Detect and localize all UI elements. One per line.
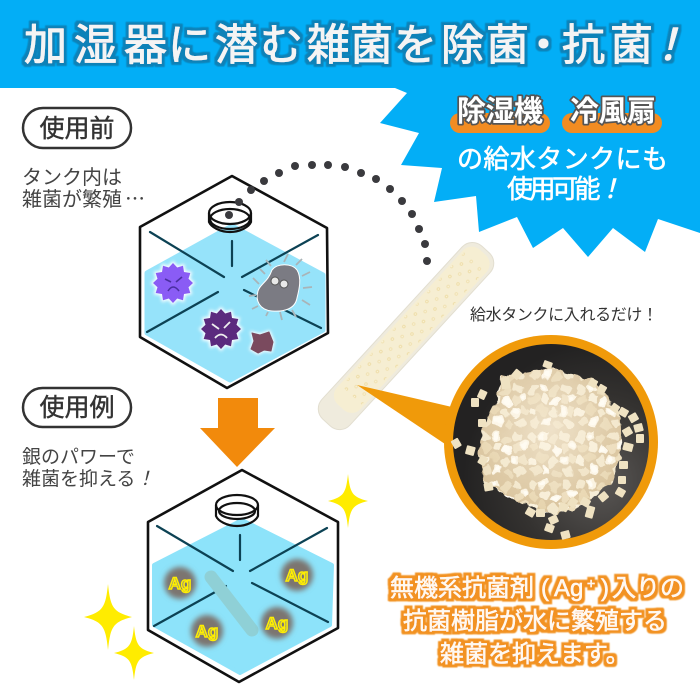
resin explanation text: ) — [601, 575, 609, 602]
in-use description — [22, 446, 154, 490]
hexagon tank outline — [140, 176, 328, 388]
tank cap — [216, 495, 258, 526]
callout text line 2: 使用可能！ — [507, 174, 623, 204]
before-use description: タンク内は — [22, 166, 122, 189]
water — [147, 226, 323, 380]
tank inner lines — [154, 526, 328, 626]
resin explanation text — [390, 575, 684, 668]
orange down arrow — [200, 398, 275, 467]
antibacterial rod — [313, 237, 500, 435]
before-use tag — [23, 108, 131, 148]
tank cap — [209, 202, 251, 232]
dotted path from tank to rod — [225, 161, 431, 265]
callout text line 1: の給水タンクにも — [457, 144, 668, 174]
dark photo backdrop — [453, 344, 649, 540]
germ: gray bacterium — [249, 254, 312, 320]
silver ions — [164, 559, 313, 647]
resin explanation text: 入りの — [612, 575, 684, 602]
tank inner lines — [147, 232, 321, 332]
tank in use — [148, 470, 338, 682]
in-use tag — [23, 388, 131, 427]
in-use description: 雑菌を抑える！ — [22, 468, 154, 490]
rod inside tank — [211, 577, 252, 630]
orange ring — [444, 335, 658, 549]
sparkle — [114, 626, 154, 680]
resin pellet magnifier — [357, 335, 658, 549]
germ: purple spiky — [153, 263, 193, 303]
before-use description: 雑菌が繁殖… — [22, 183, 145, 212]
resin explanation text: Ag — [554, 575, 583, 602]
hexagon tank outline — [148, 470, 338, 682]
title: 加湿器に潜む雑菌を除菌・抗菌！ — [24, 22, 689, 70]
resin explanation text: ( — [541, 575, 549, 602]
silver ions: Ag — [286, 566, 308, 585]
resin pellet pile — [478, 368, 622, 515]
label pill: cooling fan: 冷風扇 — [570, 95, 656, 128]
callout pointer — [357, 385, 452, 444]
germ: dark purple spiky — [201, 309, 241, 349]
resin explanation text: 雑菌を抑えます。 — [440, 641, 630, 668]
resin explanation text: + — [587, 575, 595, 591]
resin explanation text: 抗菌樹脂が水に繁殖する — [403, 608, 667, 635]
sparkle — [328, 474, 368, 528]
tank before use — [140, 176, 328, 388]
label pill: dehumidifier: 除湿機 — [457, 95, 543, 128]
silver ions: Ag — [266, 614, 288, 633]
before-use tag: 使用前 — [39, 115, 115, 143]
rod caption: 給水タンクに入れるだけ！ — [470, 306, 658, 324]
before-use description — [22, 166, 145, 212]
silver ions: Ag — [196, 622, 218, 641]
sparkle — [84, 584, 132, 650]
callout: also usable in other appliances — [450, 95, 668, 204]
silver ions: Ag — [169, 574, 191, 593]
in-use tag: 使用例 — [39, 394, 115, 422]
germ: maroon blob — [251, 332, 273, 353]
blue header and burst shape — [0, 0, 700, 257]
water — [154, 520, 332, 673]
resin explanation text: 無機系抗菌剤 — [390, 575, 534, 602]
in-use description: 銀のパワーで — [22, 446, 135, 468]
loose pellets — [451, 360, 644, 540]
